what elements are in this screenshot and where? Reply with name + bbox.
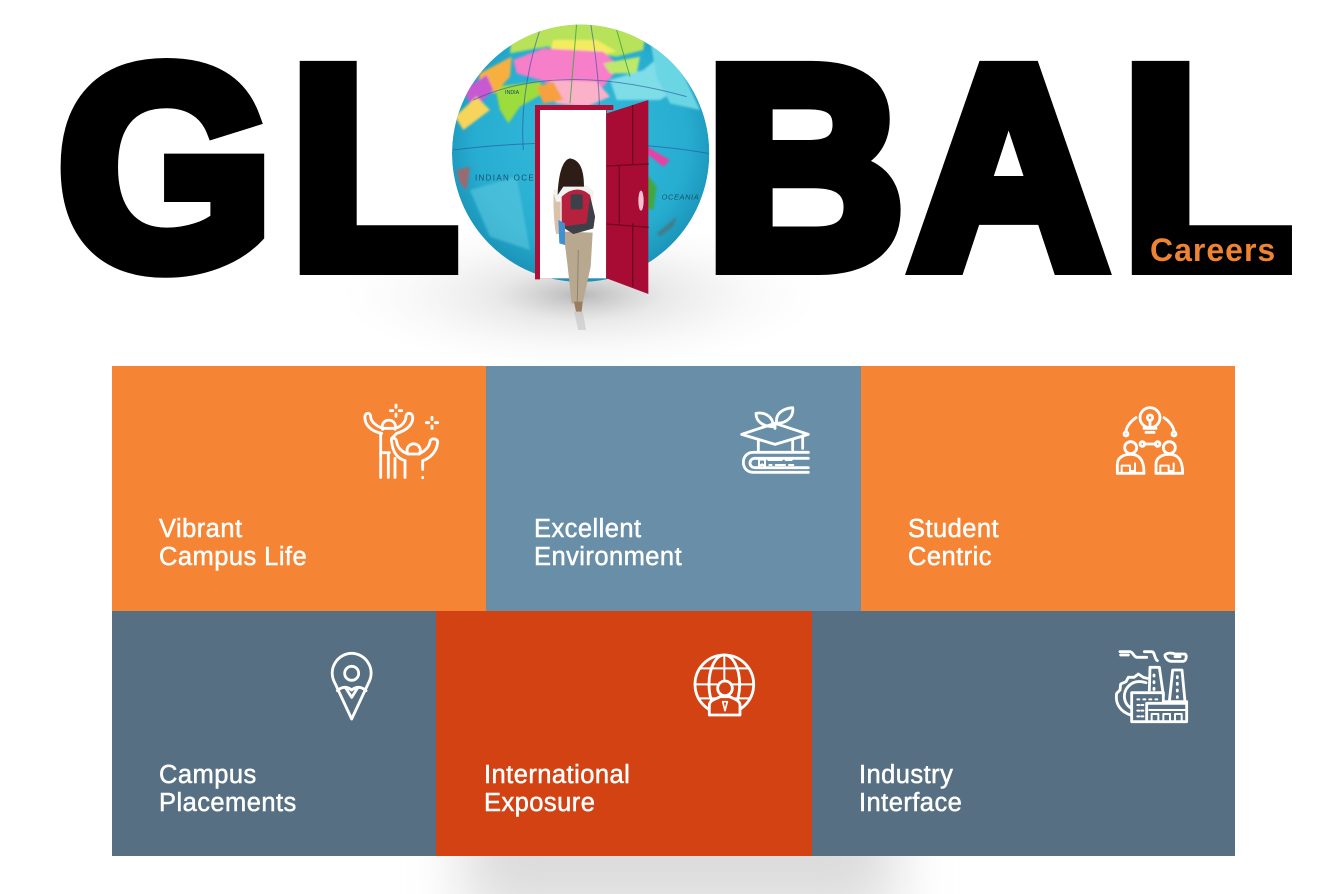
- globe with door and student: INDIA: [505, 90, 520, 96]
- panel: Student Centric: [861, 366, 1235, 611]
- panel: Vibrant Campus Life: [112, 366, 486, 611]
- globe with door and student: [452, 24, 710, 330]
- label: Campus: [159, 761, 257, 789]
- icon: two people and a lightbulb: [1116, 406, 1184, 475]
- label: International: [484, 761, 630, 789]
- label: Student: [908, 515, 999, 543]
- label: Vibrant: [159, 515, 242, 543]
- label: [859, 761, 962, 817]
- label: [484, 761, 630, 817]
- student: [553, 158, 595, 330]
- globe with door and student: OCEANIA: [662, 192, 699, 201]
- icon: factory with gear: [1114, 650, 1188, 724]
- label: Industry: [859, 761, 953, 789]
- label: [158, 515, 307, 571]
- label: Campus Life: [159, 543, 307, 571]
- label: Centric: [908, 543, 992, 571]
- panel: Industry Interface: [812, 611, 1235, 856]
- label: Excellent: [534, 515, 642, 543]
- shadow under grid: [444, 856, 916, 894]
- label: Environment: [534, 543, 682, 571]
- title: Careers: Careers: [1150, 232, 1276, 268]
- label: [534, 515, 682, 571]
- door frame: [535, 105, 613, 279]
- title: GLOBAL letters: [58, 8, 1292, 300]
- globe with door and student: INDIAN OCEAN: [475, 174, 549, 183]
- icon: celebrating people: [364, 404, 440, 480]
- panel: International Exposure: [436, 611, 812, 856]
- label: [908, 515, 999, 571]
- icon: location pin with person: [330, 652, 372, 720]
- label: Exposure: [484, 789, 595, 817]
- icon: cap on book with sprout: [740, 406, 810, 474]
- label: Placements: [159, 789, 297, 817]
- label: [159, 761, 297, 817]
- label: Interface: [859, 789, 962, 817]
- shadow under globe: [425, 254, 736, 344]
- panel: Excellent Environment: [486, 366, 861, 611]
- panel: Campus Placements: [112, 611, 436, 856]
- icon: globe with person: [694, 654, 756, 716]
- open door leaf: [607, 100, 649, 294]
